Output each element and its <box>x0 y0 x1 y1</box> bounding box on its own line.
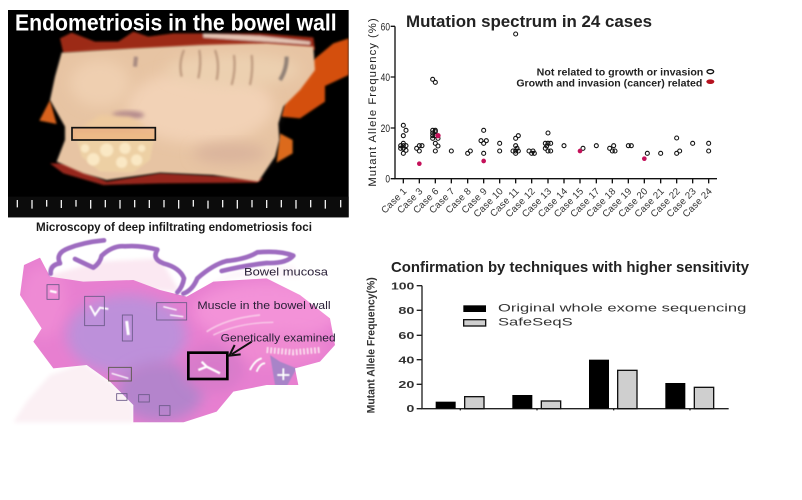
case labels: Case 9 <box>460 186 490 216</box>
open data points <box>399 32 711 155</box>
legend <box>463 303 746 328</box>
case labels <box>379 186 715 220</box>
bowel folds <box>135 50 287 85</box>
cream specimen body <box>50 43 315 182</box>
legend: SafeSeqS <box>498 316 573 328</box>
sampled region box <box>72 128 155 140</box>
bowel mucosa <box>51 240 293 294</box>
y tick labels: 100 <box>391 281 415 292</box>
arrow <box>229 342 252 356</box>
label: bowel mucosa: Bowel mucosa <box>244 267 329 279</box>
bar chart: confirmation by SafeSeqS <box>366 277 746 415</box>
case labels: Case 18 <box>584 186 618 220</box>
case labels: Case 21 <box>633 186 667 220</box>
case labels: Case 19 <box>600 186 634 220</box>
y axis title: Mutant Allele Frequency(%) <box>366 277 378 413</box>
axes <box>417 286 729 410</box>
case labels: Case 23 <box>665 186 699 220</box>
genetically examined box <box>188 353 227 379</box>
y tick labels: 60 <box>398 331 415 342</box>
y tick labels <box>381 21 390 186</box>
microscopy caption: Microscopy of deep infiltrating endometriosis foci <box>36 222 312 234</box>
case labels: Case 1 <box>379 186 409 216</box>
legend: Growth and invasion (cancer) related <box>516 78 702 89</box>
ruler <box>8 197 349 217</box>
y tick labels: 80 <box>398 306 415 317</box>
scatter chart: mutation spectrum <box>367 18 717 220</box>
legend: Not related to growth or invasion <box>537 67 703 78</box>
panel: bowel wall photograph <box>8 10 349 217</box>
y tick labels: 20 <box>398 380 415 391</box>
label: muscle: Muscle in the bowel wall <box>197 300 331 312</box>
y tick labels: 40 <box>398 355 415 366</box>
examined foci boxes <box>47 285 187 415</box>
case labels: Case 11 <box>488 186 522 220</box>
case labels: Case 22 <box>649 186 683 220</box>
case labels: Case 10 <box>472 186 506 220</box>
case labels: Case 20 <box>616 186 650 220</box>
case labels: Case 15 <box>552 186 586 220</box>
case labels: Case 17 <box>568 186 602 220</box>
fatty tissue <box>13 258 300 422</box>
legend: Original whole exome sequencing <box>498 303 746 315</box>
case labels: Case 14 <box>536 186 570 220</box>
case labels: Case 6 <box>411 186 441 216</box>
case labels: Case 7 <box>427 186 457 216</box>
photo title: Endometriosis in the bowel wall <box>15 10 337 36</box>
y tick labels: 0 <box>406 404 415 415</box>
case labels: Case 24 <box>681 186 715 220</box>
panel: microscopy section <box>13 240 340 425</box>
bars: original whole exome sequencing <box>436 360 685 409</box>
y tick labels: 40 <box>381 72 390 84</box>
y tick labels: 0 <box>385 174 390 186</box>
case labels: Case 3 <box>395 186 425 216</box>
y tick labels: 60 <box>381 21 390 33</box>
y axis title: Mutant Allele Frequency (%) <box>367 18 379 187</box>
axes <box>391 26 717 183</box>
case labels: Case 12 <box>504 186 538 220</box>
red tissue edges <box>39 32 349 185</box>
case labels: Case 8 <box>444 186 474 216</box>
legend <box>516 67 714 89</box>
y tick labels <box>391 281 415 415</box>
cancer-related data points <box>417 133 647 166</box>
case labels: Case 13 <box>520 186 554 220</box>
endometriotic nodule <box>78 141 152 172</box>
bar chart title: Confirmation by techniques with higher sensitivity <box>391 259 750 276</box>
label: genetically examined: Genetically examined <box>221 332 336 344</box>
y tick labels: 20 <box>381 123 390 135</box>
bars: SafeSeqS <box>465 370 714 409</box>
glands <box>50 291 220 378</box>
muscle tissue <box>13 252 340 425</box>
scatter chart title: Mutation spectrum in 24 cases <box>406 12 652 31</box>
